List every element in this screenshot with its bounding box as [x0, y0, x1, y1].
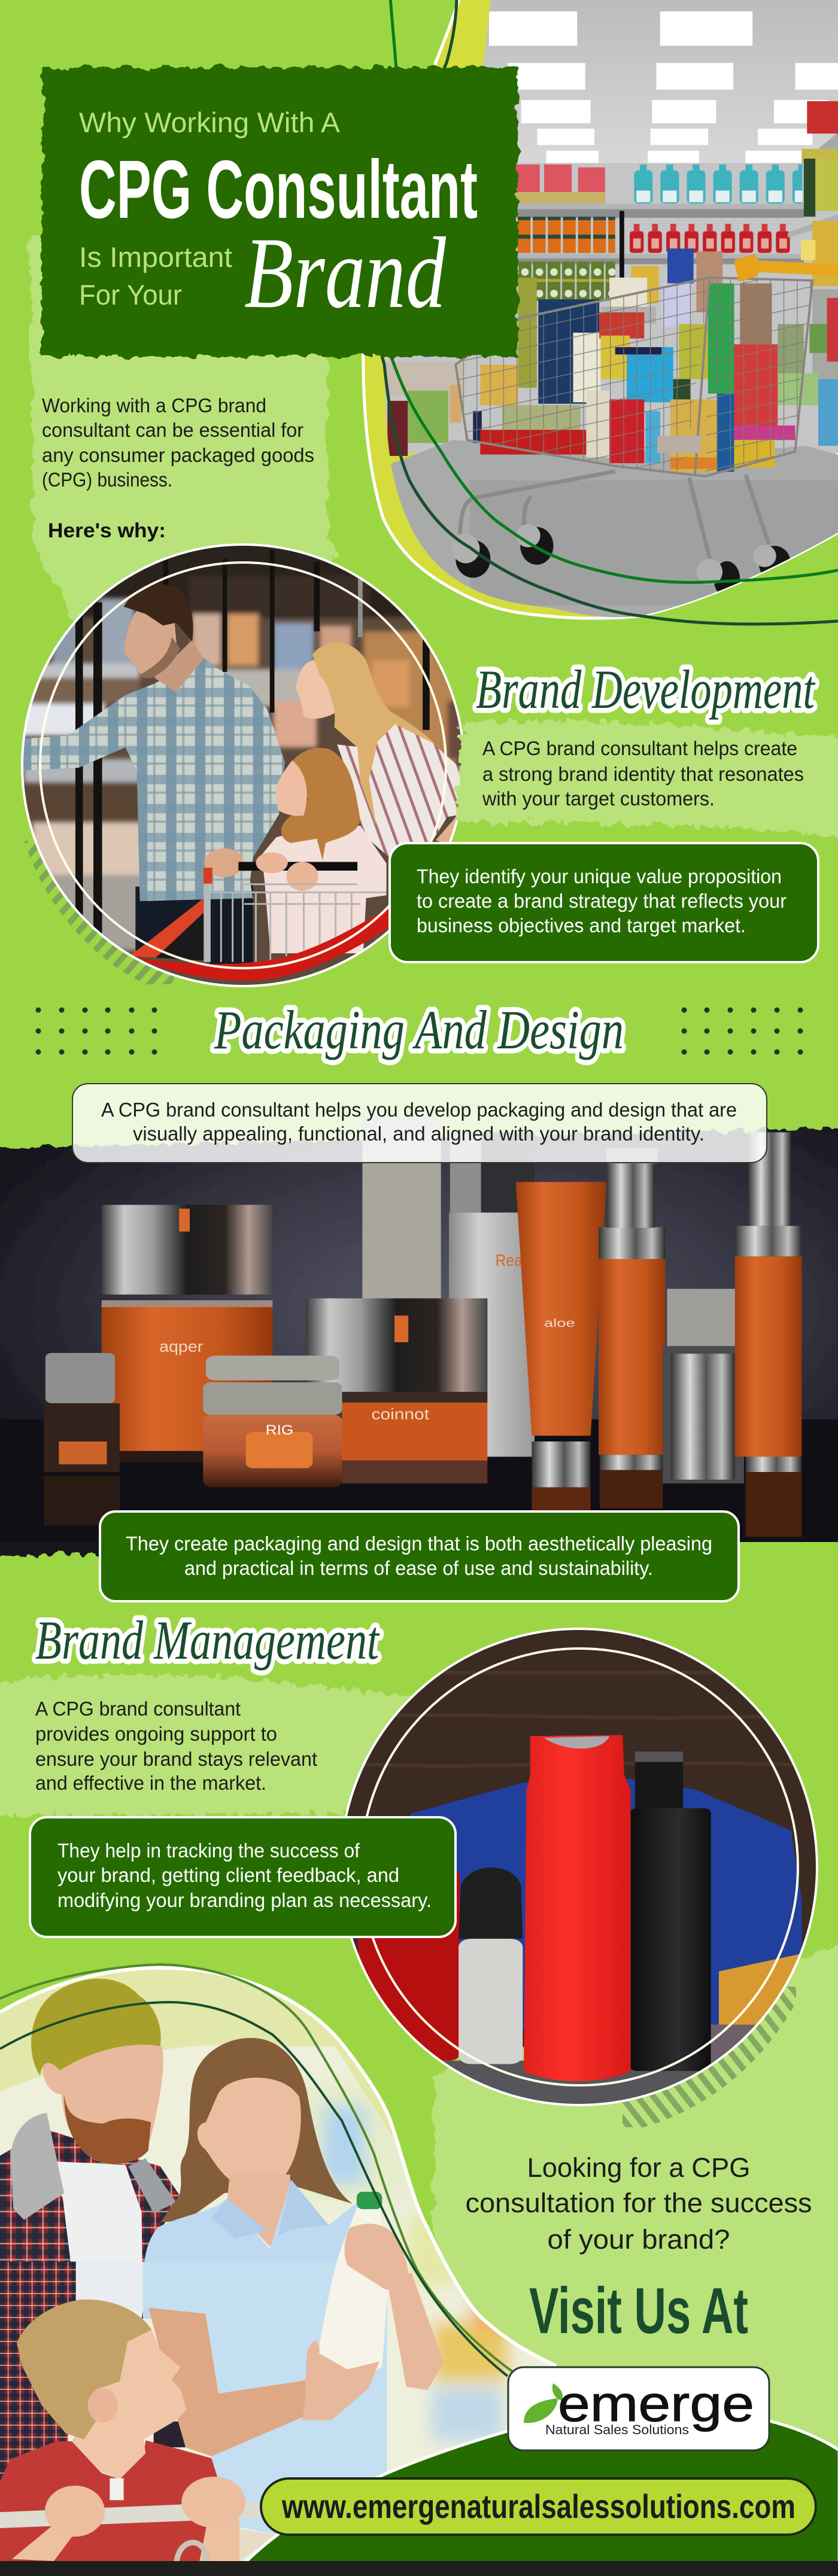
light green panel lower right [434, 1939, 838, 2459]
title line 4: For Your [79, 279, 182, 311]
soap [719, 1954, 799, 2033]
footer bar [0, 2561, 838, 2576]
man's hand [204, 848, 244, 877]
photo circle: personal care bottles [332, 1617, 828, 2130]
intro text: (CPG) business. [42, 469, 172, 491]
floor [377, 440, 838, 626]
card: tracking success: They help in tracking the success of [57, 1839, 360, 1862]
dark accent curve [375, 0, 838, 624]
woman's polo upper [142, 2180, 387, 2319]
cart bar [0, 2501, 259, 2528]
boy's arms [12, 2519, 239, 2561]
jacket behind arm [154, 2422, 186, 2447]
description: and effective in the market. [35, 1772, 266, 1794]
brush band [0, 1675, 455, 1816]
boy's neck [72, 2440, 145, 2479]
white border of photo [0, 1968, 556, 2366]
product labels: aqper [159, 1338, 203, 1355]
woman's hand on bottle [344, 2224, 410, 2292]
description [35, 1698, 317, 1794]
black bottle [630, 1808, 711, 2071]
big jar [102, 1205, 272, 1462]
yellow cart handle [749, 266, 838, 270]
woman's shirt [337, 721, 463, 857]
small left bottle [44, 1353, 120, 1525]
title line 2: CPG Consultant [79, 144, 478, 236]
intro text: consultant can be essential for [42, 419, 303, 441]
dark backdrop with rough edges [0, 1127, 838, 1557]
woman's hair [160, 2038, 353, 2222]
card: tracking success [30, 1817, 456, 1937]
card: tracking success: modifying your branding plan as necessary. [57, 1889, 432, 1911]
white tall tube [362, 1117, 441, 1308]
logo wordmark: emerge [558, 2376, 754, 2432]
boy's hair [17, 2300, 151, 2440]
right side shelving [804, 159, 815, 217]
heading: Brand Management [35, 1610, 380, 1671]
title block [42, 67, 518, 357]
intro text: any consumer packaged goods [42, 444, 314, 466]
man's lower shirt [76, 2262, 144, 2310]
dots right [681, 1008, 803, 1054]
red bag [358, 1868, 460, 2061]
supermarket photo circle [363, 0, 838, 626]
cart contents [518, 278, 537, 388]
title line 1: Why Working With A [79, 107, 341, 138]
woman's collar [211, 2180, 329, 2239]
description: ensure your brand stays relevant [35, 1748, 317, 1770]
woman's other arm [387, 2273, 444, 2390]
store background [12, 539, 476, 950]
cart post [204, 868, 212, 884]
woman's neck [227, 2174, 293, 2246]
boy [0, 2300, 259, 2563]
card: aesthetic and practical [100, 1511, 739, 1601]
card: brand strategy: business objectives and target market. [417, 914, 746, 936]
card: brand strategy: to create a brand strategy that reflects your [417, 890, 787, 912]
milk bottle [317, 2208, 387, 2374]
seat ring [177, 2542, 208, 2562]
logo tagline: Natural Sales Solutions [545, 2422, 689, 2437]
floor below cart [238, 2529, 280, 2562]
callout: packaging intro: visually appealing, functional, and aligned with your brand identity. [133, 1123, 705, 1145]
back wall [377, 163, 838, 453]
hatch accent left [24, 841, 174, 984]
girl's sweater [262, 826, 387, 953]
woman's face [296, 660, 336, 719]
product labels [159, 1251, 575, 1437]
dark accent curve [0, 2002, 508, 2376]
orange tube [516, 1182, 606, 1510]
man's lower jacket [0, 2262, 78, 2481]
photo: family with milk bottle [0, 1951, 581, 2573]
call to action text [466, 2152, 812, 2255]
product labels: RIG [266, 1422, 293, 1437]
boy's hands [45, 2486, 105, 2537]
inner ring [40, 562, 446, 968]
man's face [42, 2044, 163, 2163]
intro text [42, 394, 314, 491]
man's jacket [0, 2129, 182, 2319]
man's face [124, 608, 178, 678]
left shelving [377, 361, 464, 397]
title line 3: Is Important [79, 241, 232, 273]
man's hair [31, 1979, 161, 2076]
call to action text: of your brand? [547, 2224, 730, 2255]
man's pants [135, 887, 205, 950]
photo circle: family shopping [12, 533, 476, 997]
card: brand strategy [390, 843, 818, 962]
title script word: Brand [244, 217, 447, 329]
logo card [508, 2367, 769, 2450]
card: aesthetic and practical: and practical in terms of ease of use and sustainability. [184, 1557, 653, 1579]
girl's hair [281, 748, 360, 860]
description: provides ongoing support to [35, 1723, 277, 1745]
orange pump bottle [599, 1148, 666, 1509]
olive tint on upper area [0, 1957, 479, 2304]
small silver bottle [663, 1289, 744, 1483]
wire basket [456, 278, 709, 473]
woman's arm [148, 2308, 371, 2456]
product labels: Rea [496, 1251, 522, 1270]
cart wires [210, 884, 387, 962]
call to action text: consultation for the success [466, 2188, 812, 2218]
woman's face [198, 2078, 301, 2189]
description: a strong brand identity that resonates [482, 763, 804, 785]
wood background [332, 1617, 828, 2047]
blue bag [369, 1779, 801, 2030]
description: A CPG brand consultant helps create [482, 737, 797, 759]
intro text: Working with a CPG brand [42, 394, 266, 416]
light green brush panel behind intro text [29, 236, 341, 628]
product labels: coinnot [372, 1406, 429, 1423]
man's hood [11, 2113, 64, 2220]
boy's face [72, 2329, 187, 2441]
title brush background [42, 67, 518, 357]
silver cap jar [306, 1298, 487, 1483]
woman's lower hand [302, 2341, 379, 2420]
store interior [374, 0, 838, 626]
logo leaves [524, 2383, 563, 2423]
shelf row 2 [517, 217, 615, 253]
roll-on bottle [459, 1939, 523, 2064]
freezer pillars [75, 550, 430, 933]
shelf row 1 [514, 165, 540, 203]
right pump bottle [735, 1132, 801, 1537]
table surface [0, 1419, 838, 1542]
description: with your target customers. [482, 787, 715, 810]
card: brand strategy: They identify your unique value proposition [417, 865, 782, 887]
boy's ear [88, 2389, 118, 2422]
callout: packaging intro: A CPG brand consultant helps you develop packaging and design that are [101, 1099, 737, 1121]
boy's shirt [0, 2440, 217, 2563]
description [482, 737, 804, 810]
heading: packaging and design: Packaging And Design [214, 999, 624, 1060]
woman's hair [312, 642, 436, 826]
man's neck [154, 640, 204, 692]
section: brand management [0, 1610, 455, 1816]
man's beard [64, 2094, 151, 2164]
man's stubble [140, 637, 180, 679]
chassis and wheels [460, 472, 769, 563]
man's shirt [50, 2161, 143, 2319]
hatch accent right [327, 1598, 830, 2136]
dots left [36, 1008, 157, 1054]
website pill [261, 2478, 816, 2535]
call to action text: Looking for a CPG [527, 2152, 751, 2183]
description: A CPG brand consultant [35, 1698, 241, 1720]
inner ring [361, 1649, 798, 2085]
gray lid jar [203, 1355, 342, 1488]
outer ring [341, 1629, 817, 2105]
callout: packaging intro [72, 1084, 767, 1163]
girl's face [276, 761, 307, 816]
card: tracking success: your brand, getting client feedback, and [57, 1864, 399, 1886]
man's shirt [22, 658, 285, 901]
section: brand development [455, 659, 838, 839]
ceiling lights [489, 11, 838, 164]
brush band [455, 721, 838, 839]
product labels: aloe [544, 1316, 575, 1330]
green accent curve [375, 0, 838, 582]
silver bottle [449, 1212, 535, 1456]
man's hair [124, 584, 193, 641]
card: aesthetic and practical: They create packaging and design that is both aesthetically pleasing [126, 1532, 712, 1555]
dark green footer blob [241, 2408, 838, 2567]
woman's polo lower [142, 2262, 387, 2535]
yellow band with white edge [363, 0, 838, 618]
outer ring [22, 545, 464, 986]
gray surface [332, 2061, 828, 2130]
blurred store background [0, 1951, 581, 2573]
packaging photo band [0, 1117, 838, 1557]
shelf row 3 [518, 261, 615, 301]
cart handle [238, 862, 357, 871]
girl's hands [256, 852, 288, 873]
red bottle [524, 1735, 631, 2081]
here's why label: Here's why: [48, 519, 166, 542]
olive accent curve [0, 1964, 513, 2372]
cart red frame [130, 898, 204, 957]
